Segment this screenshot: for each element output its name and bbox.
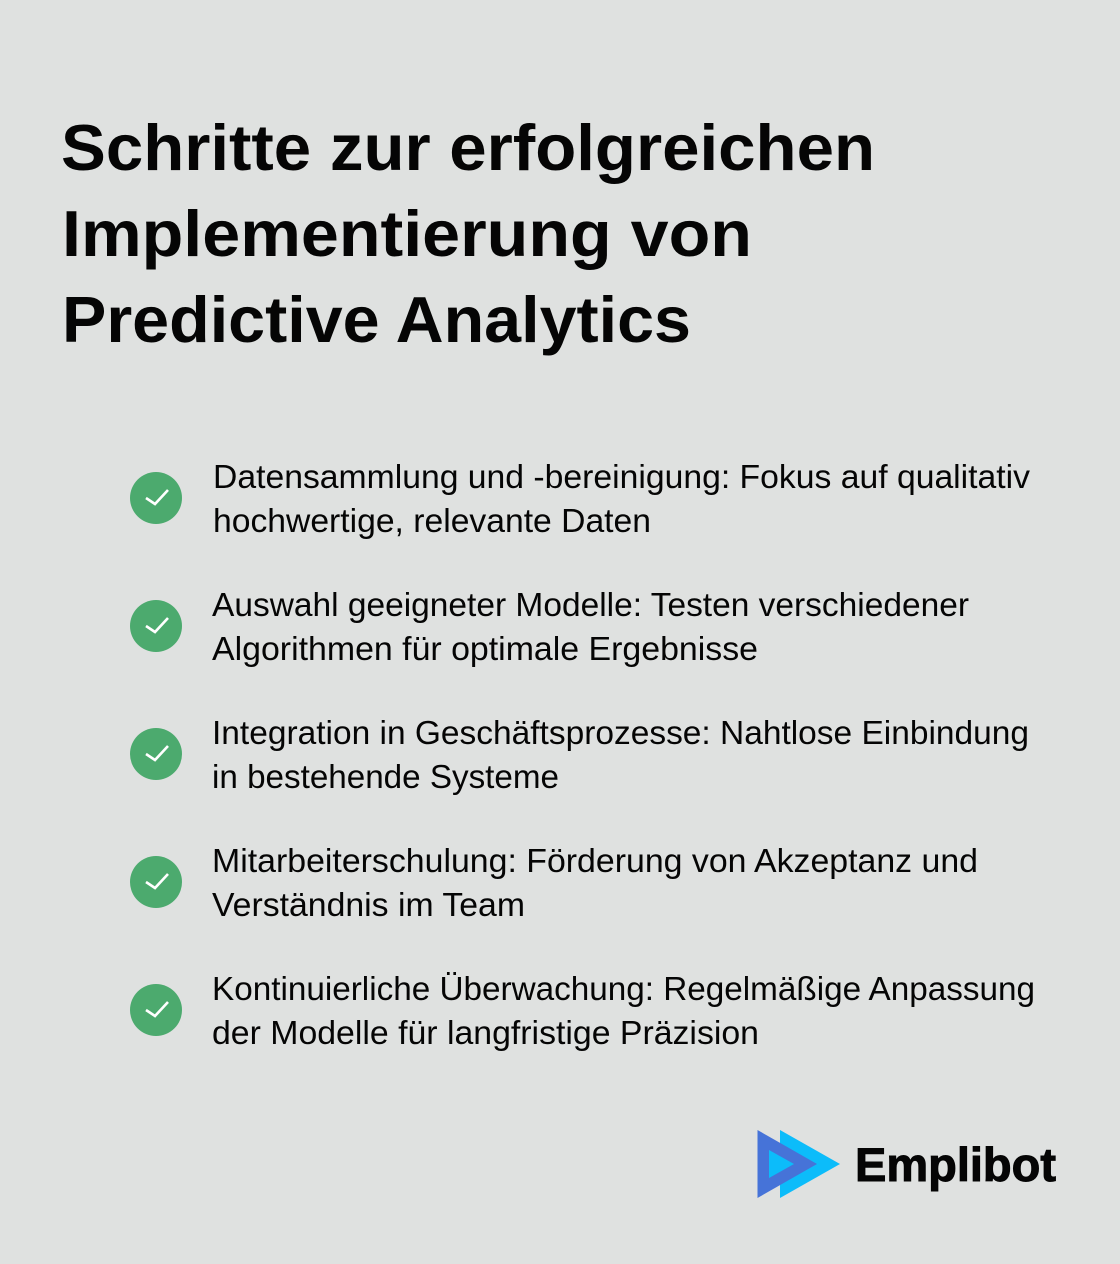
item 3: Integration: Integration in Geschäftsprozesse: Nahtlose Einbindung: [212, 714, 1029, 751]
logo wordmark: Emplibot: [855, 1138, 1056, 1191]
item 3: Integration: in bestehende Systeme: [212, 758, 559, 795]
item 1: Datensammlung: Datensammlung und -bereinigung: Fokus auf qualitativ: [213, 458, 1030, 495]
title: Predictive Analytics: [62, 283, 691, 356]
item 4: Mitarbeiterschulung: Verständnis im Team: [212, 886, 525, 923]
item 4: Mitarbeiterschulung: Mitarbeiterschulung: Förderung von Akzeptanz und: [212, 842, 978, 879]
item 5: Überwachung: [130, 970, 1035, 1051]
item 2: Modellauswahl: [130, 586, 969, 667]
item 5: Überwachung: Kontinuierliche Überwachung: Regelmäßige Anpassung: [212, 970, 1035, 1007]
item 4: Mitarbeiterschulung: [130, 842, 978, 923]
title: Schritte zur erfolgreichen: [61, 111, 875, 184]
logo: Emplibot: [758, 1130, 1056, 1198]
icon: play triangles: [758, 1130, 840, 1198]
title: [61, 111, 875, 356]
item 3: Integration: [130, 714, 1029, 795]
checklist: [130, 458, 1035, 1051]
item 2: Modellauswahl: Algorithmen für optimale Ergebnisse: [212, 630, 758, 667]
item 2: Modellauswahl: Auswahl geeigneter Modelle: Testen verschiedener: [212, 586, 969, 623]
item 5: Überwachung: der Modelle für langfristige Präzision: [212, 1014, 759, 1051]
title: Implementierung von: [62, 197, 752, 270]
item 1: Datensammlung: hochwertige, relevante Daten: [213, 502, 651, 539]
item 1: Datensammlung: [130, 458, 1030, 539]
